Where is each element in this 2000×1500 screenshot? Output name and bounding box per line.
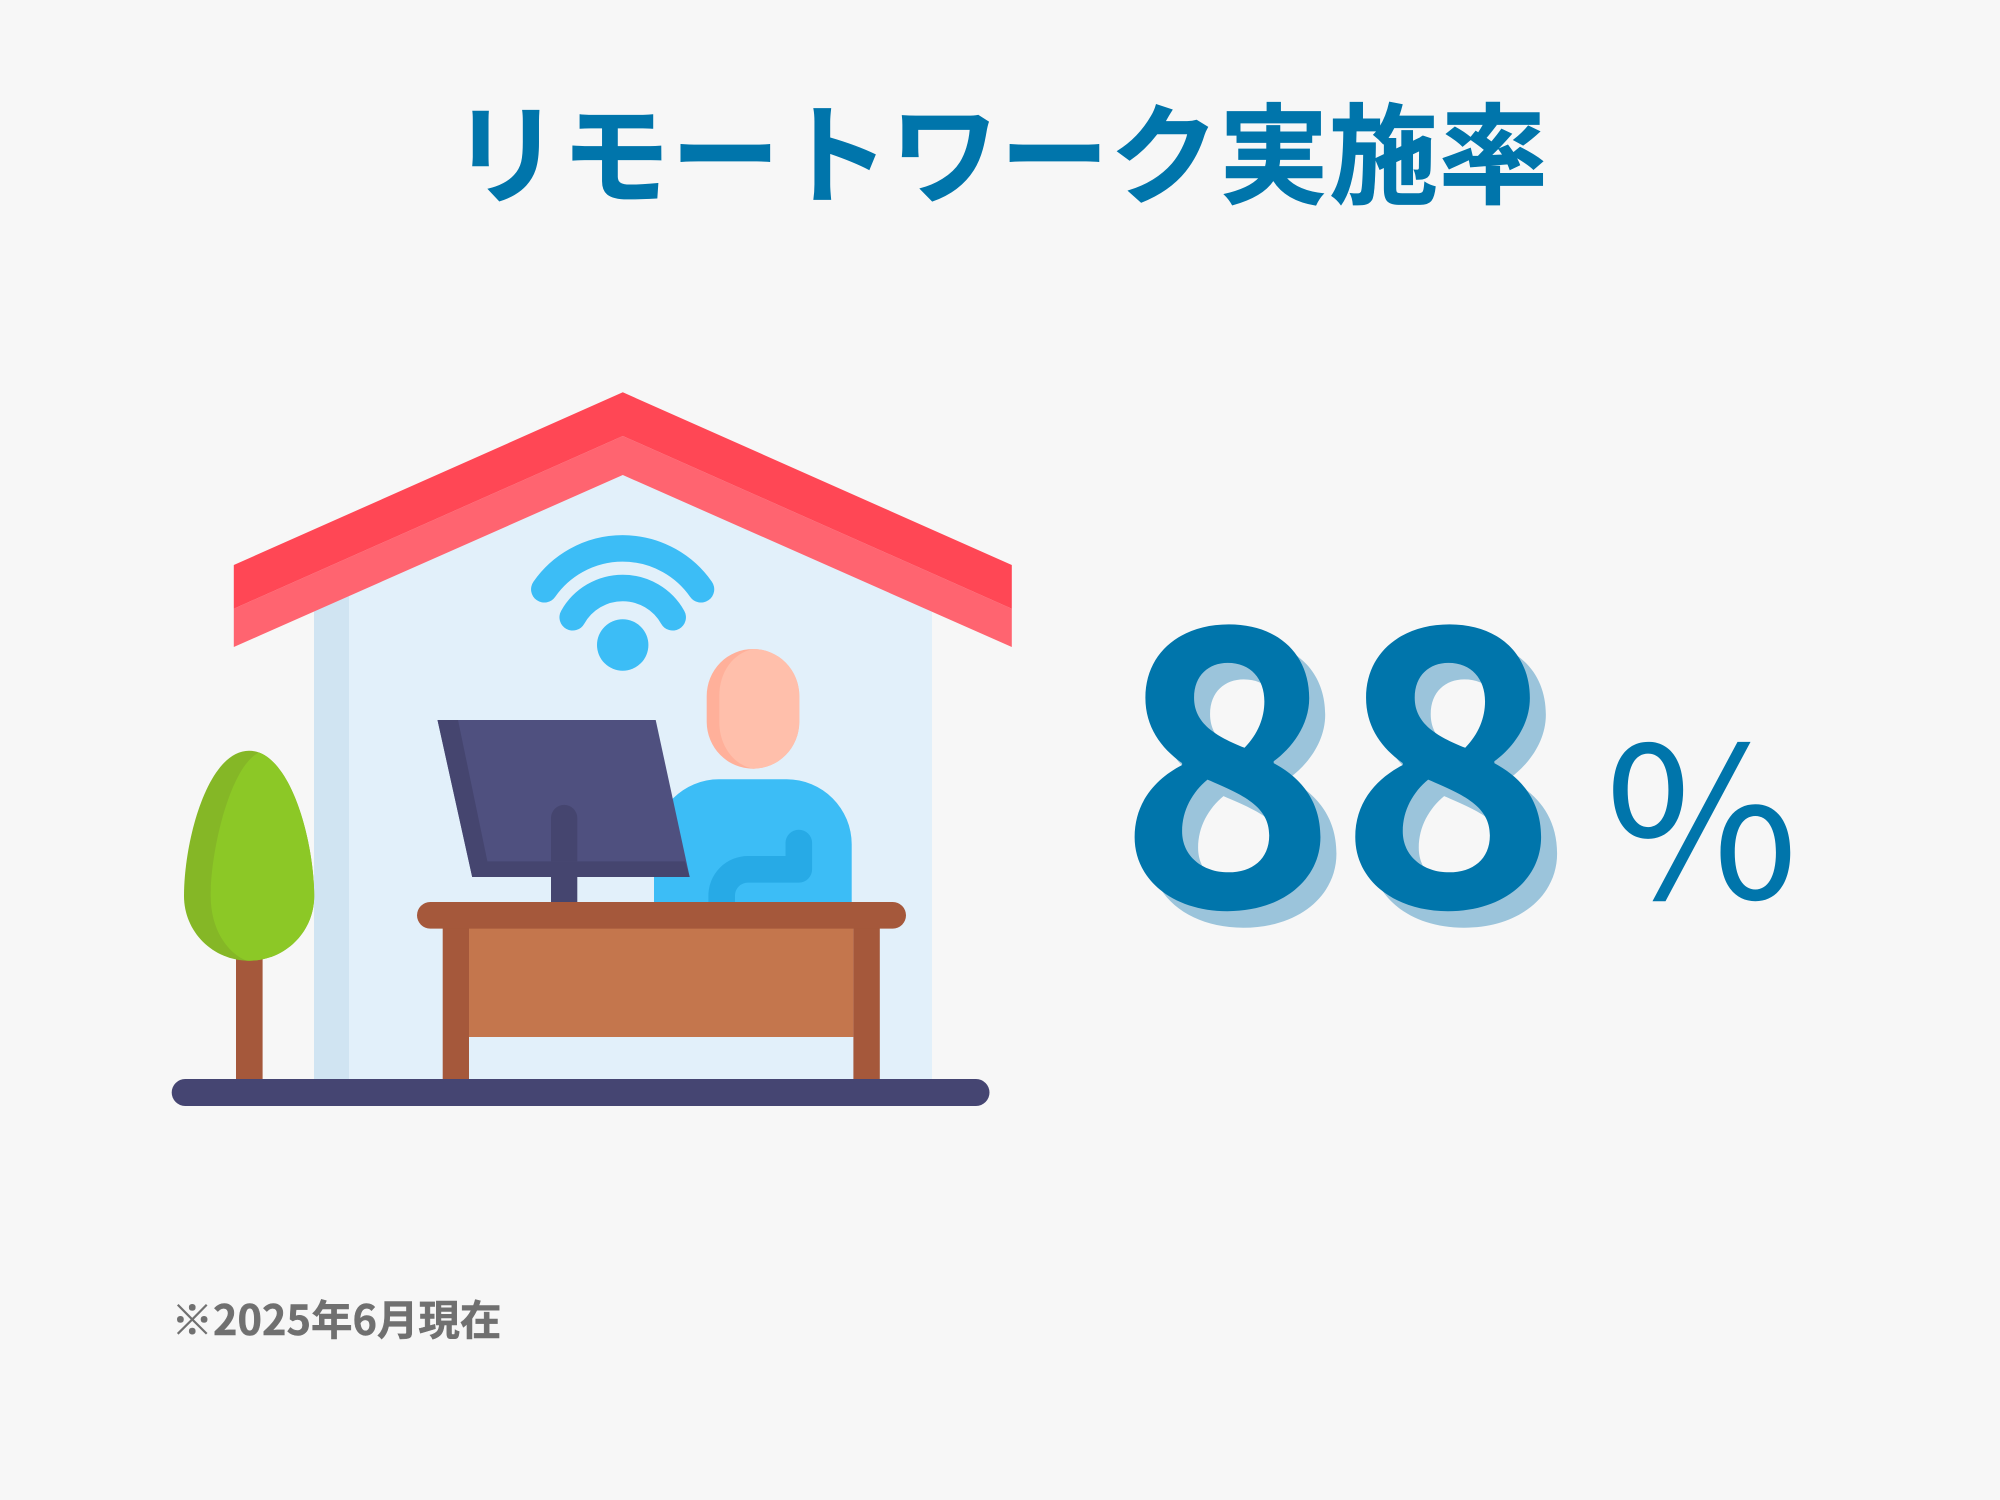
- title: リモートワーク実施率: [452, 70, 1548, 227]
- house wall: [314, 475, 932, 1079]
- footnote: ※2025年6月現在: [172, 1287, 501, 1347]
- person: [654, 649, 852, 912]
- icon: wifi signal: [544, 548, 701, 671]
- tree: [184, 750, 314, 1079]
- floor: [172, 1079, 989, 1106]
- illustration: remote work house: [172, 392, 1012, 1106]
- percentage value: [1117, 472, 1798, 1030]
- number 88: 88: [1117, 472, 1558, 1014]
- roof: [234, 392, 1012, 647]
- person body: [654, 779, 852, 902]
- computer monitor: [438, 720, 690, 915]
- percent sign: %: [1605, 656, 1798, 960]
- number shadow: 88: [1133, 488, 1574, 1030]
- person arm: [722, 843, 799, 912]
- person head: [707, 649, 799, 769]
- desk: [417, 902, 906, 1102]
